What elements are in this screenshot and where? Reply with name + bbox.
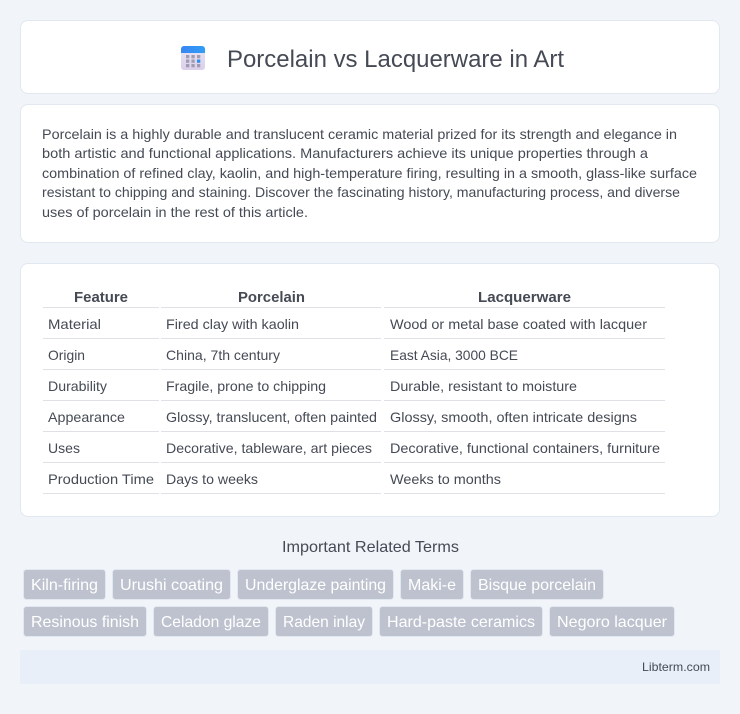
row: appearance <box>48 409 637 425</box>
intro paragraph: uses of porcelain in the rest of this article. <box>42 204 308 220</box>
row: durability <box>48 378 577 394</box>
tags: related terms: Raden inlay <box>283 614 365 631</box>
row: production time: Production Time <box>48 471 154 487</box>
row: durability: Durability <box>48 378 107 394</box>
row: origin: Origin <box>48 347 85 363</box>
row: durability: Durable, resistant to moisture <box>390 378 577 394</box>
tags: related terms: Bisque porcelain <box>478 577 596 594</box>
row: material: Material <box>48 316 101 332</box>
tags: related terms: Resinous finish <box>31 614 139 631</box>
tags: related terms: Celadon glaze <box>161 614 261 631</box>
intro paragraph: Porcelain is a highly durable and translucent ceramic material prized for its strength and elegance in <box>42 126 677 142</box>
intro paragraph: combination of refined clay, kaolin, and high-temperature firing, resulting in a smooth, glass-like surface <box>42 165 697 181</box>
panel: intro card <box>20 104 720 243</box>
intro paragraph: both artistic and functional applications. Manufacturers achieve its unique properties through a <box>42 145 648 161</box>
table header row: Lacquerware <box>478 290 571 306</box>
heading: important related terms: Important Related Terms <box>282 539 459 556</box>
comparison table <box>43 290 665 494</box>
row: durability: Fragile, prone to chipping <box>166 378 326 394</box>
tags: related terms <box>24 570 674 636</box>
row: appearance: Appearance <box>48 409 125 425</box>
row: origin <box>48 347 518 363</box>
tags: related terms: Urushi coating <box>120 577 223 594</box>
row: appearance: Glossy, smooth, often intricate designs <box>390 409 637 425</box>
panel: footer bar <box>20 650 720 684</box>
table header row <box>74 290 571 306</box>
tags: related terms: Kiln-firing <box>31 577 98 594</box>
row: material: Fired clay with kaolin <box>166 316 299 332</box>
table header row: Porcelain <box>238 290 305 306</box>
tags: related terms: Hard-paste ceramics <box>387 614 535 631</box>
row: uses <box>48 440 660 456</box>
row: material: Wood or metal base coated with lacquer <box>390 316 647 332</box>
row: appearance: Glossy, translucent, often painted <box>166 409 377 425</box>
panel: comparison table card <box>20 263 720 517</box>
footer credit: Libterm.com <box>642 660 710 674</box>
row: uses: Decorative, tableware, art pieces <box>166 440 372 456</box>
table rules <box>43 308 665 494</box>
row: production time: Weeks to months <box>390 471 501 487</box>
title: Porcelain vs Lacquerware in Art <box>227 46 564 73</box>
tags: related terms: Underglaze painting <box>245 577 386 594</box>
tags: related terms: Maki-e <box>408 577 456 594</box>
row: origin: China, 7th century <box>166 347 280 363</box>
row: origin: East Asia, 3000 BCE <box>390 347 518 363</box>
panel: title card <box>20 20 720 94</box>
icon: calendar grid <box>181 46 205 70</box>
intro paragraph <box>42 126 697 220</box>
row: uses: Uses <box>48 440 80 456</box>
row: uses: Decorative, functional containers, furniture <box>390 440 660 456</box>
row: production time <box>48 471 501 487</box>
table header row: Feature <box>74 290 128 306</box>
row: production time: Days to weeks <box>166 471 258 487</box>
tags: related terms: Negoro lacquer <box>557 614 668 631</box>
row: material <box>48 316 647 332</box>
intro paragraph: resistant to chipping and staining. Discover the fascinating history, manufacturing process, and diverse <box>42 184 680 200</box>
